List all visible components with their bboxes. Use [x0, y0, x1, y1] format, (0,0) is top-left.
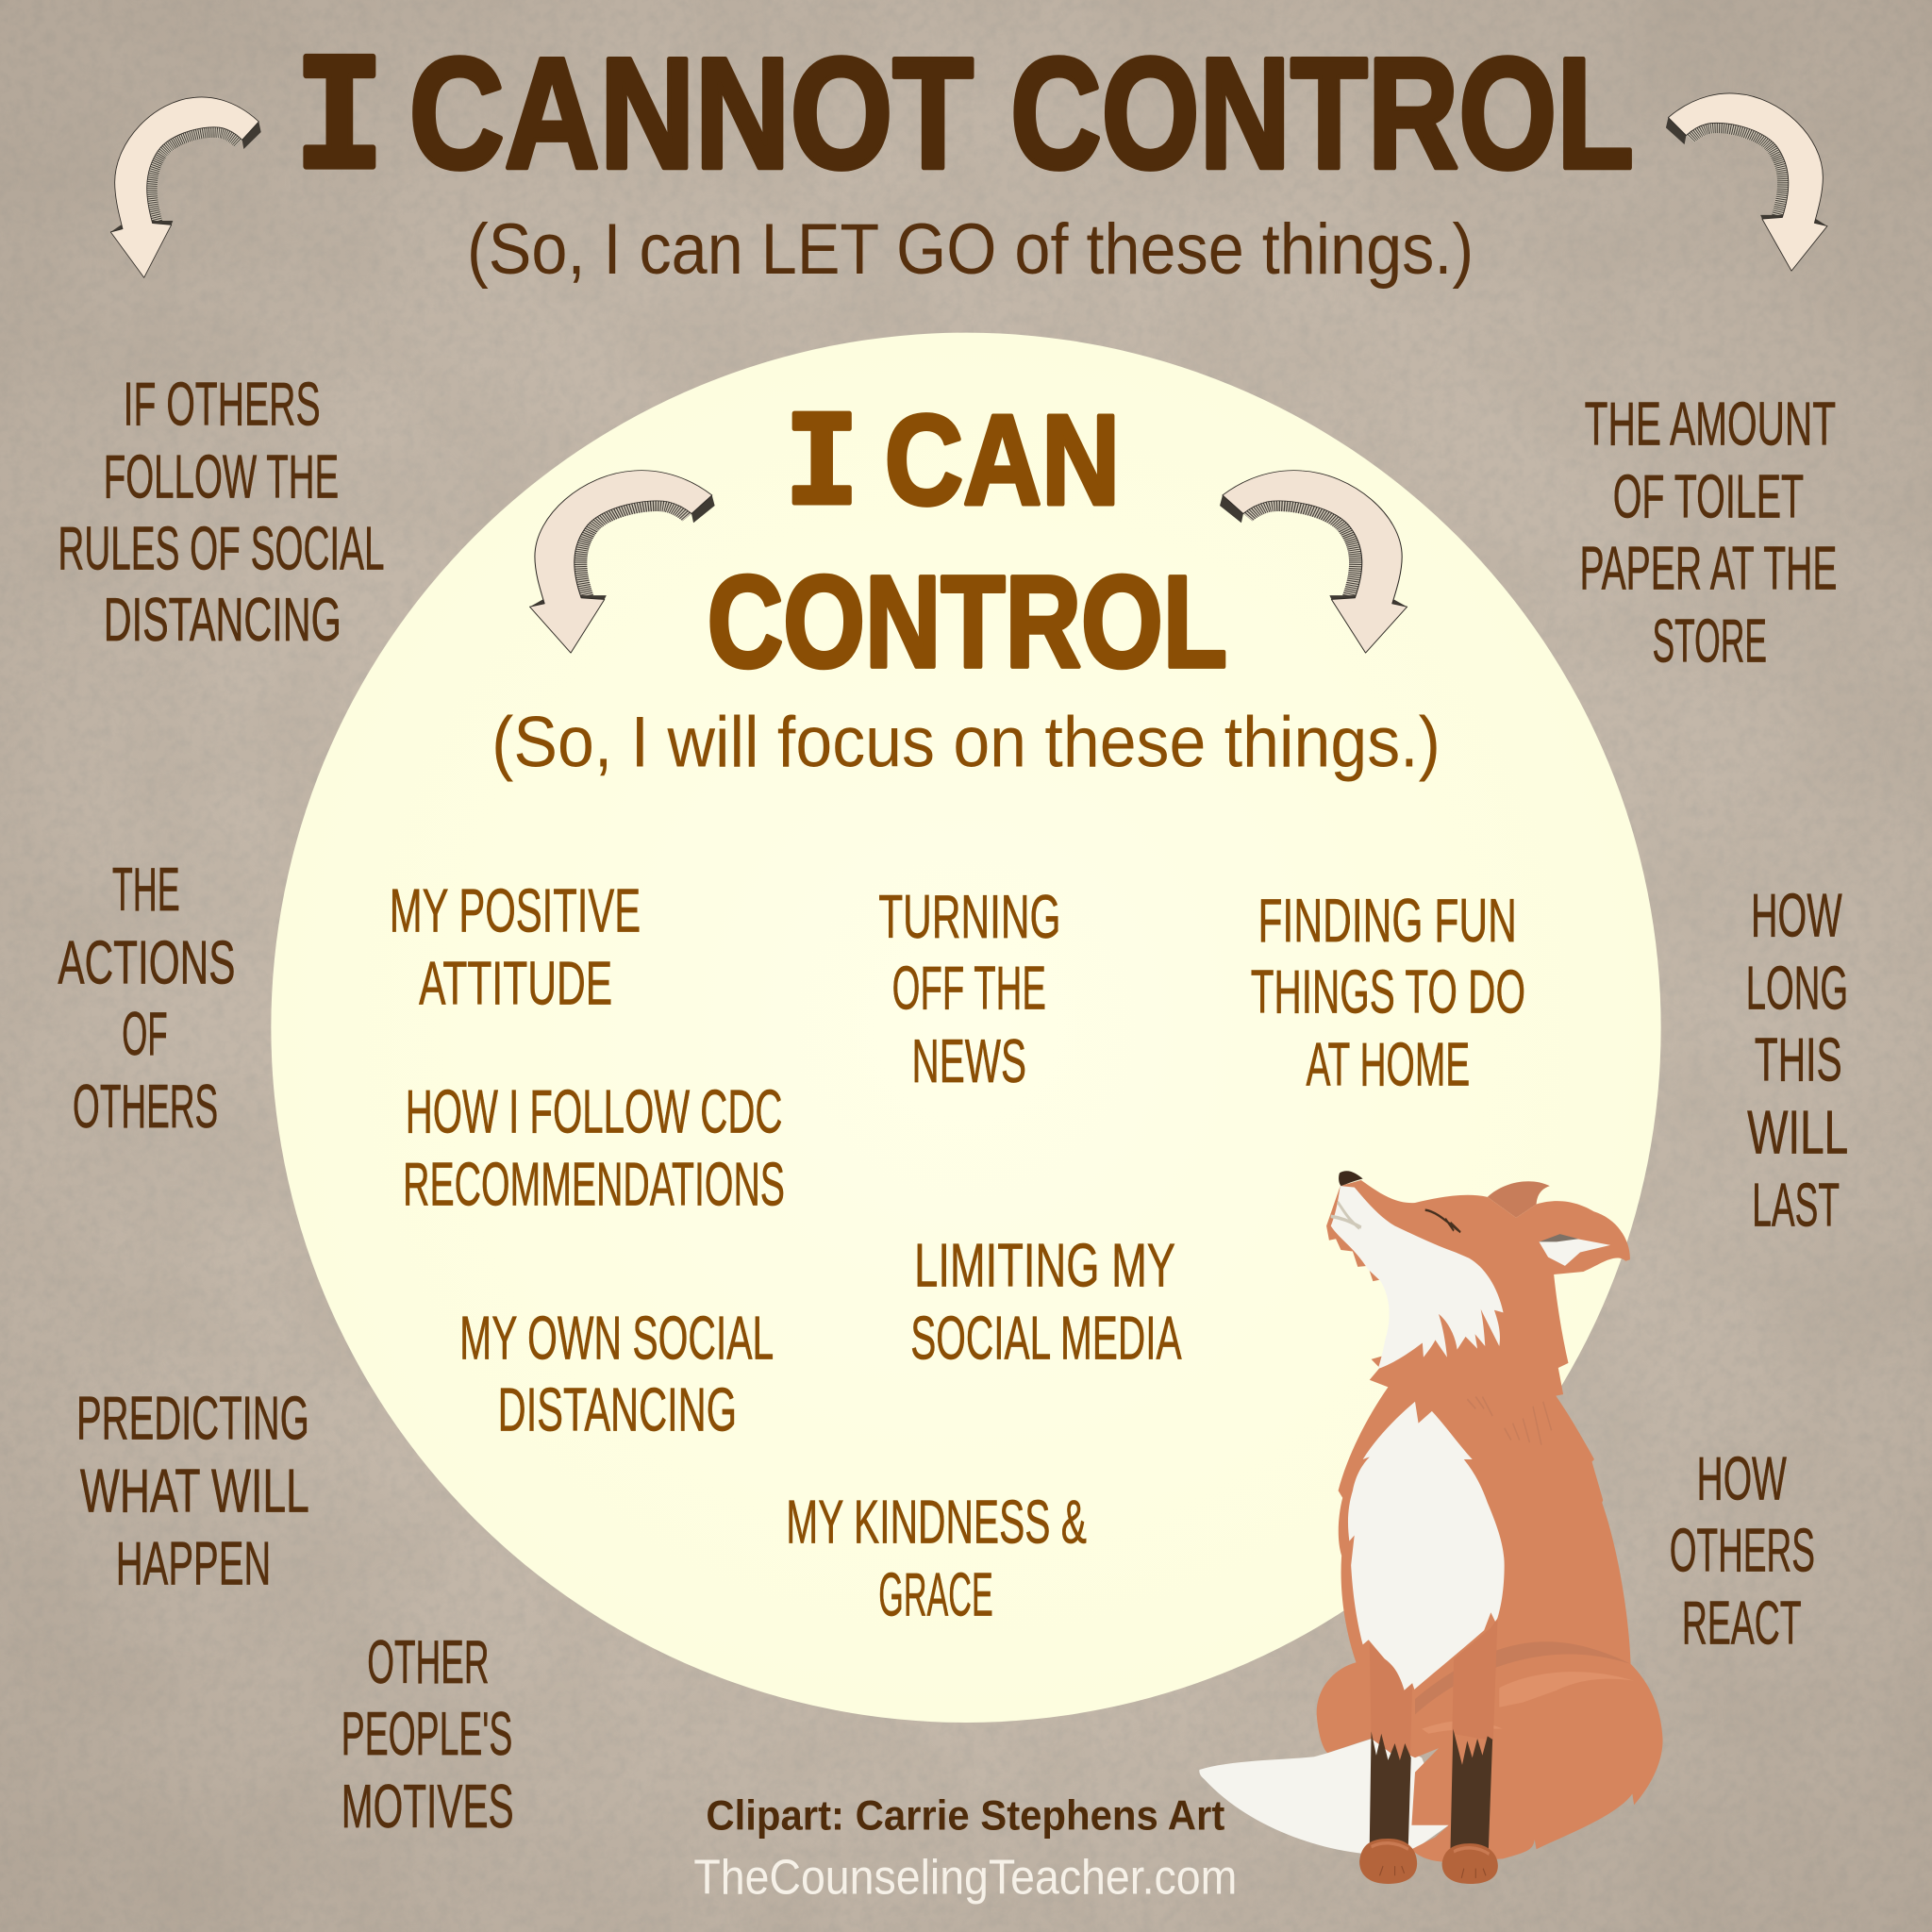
credit: clipart: Clipart: Carrie Stephens Art: [706, 1793, 1224, 1840]
can control: own social distancing: [459, 1304, 774, 1443]
fox: right sock: [1451, 1729, 1492, 1849]
can control: turning off news: TURNING: [878, 882, 1061, 951]
can control: CDC recommendations: [403, 1076, 785, 1218]
fox: left paw: [1359, 1839, 1417, 1884]
cannot control: actions of others: ACTIONS: [58, 927, 235, 996]
subtitle: focus: (So, I will focus on these things.): [491, 702, 1441, 782]
can control: own social distancing: DISTANCING: [498, 1374, 737, 1443]
fox: haunch shade: [1415, 1641, 1631, 1714]
cannot control: how long: LAST: [1752, 1171, 1840, 1240]
fox: right foreleg: [1452, 1618, 1498, 1740]
cannot control: how long: THIS: [1755, 1024, 1842, 1093]
cannot control: motives: OTHER: [367, 1627, 490, 1696]
arrow: top right: [1666, 93, 1827, 271]
fox: tail tip: [1199, 1736, 1449, 1854]
cannot control: rules of social distancing: [58, 370, 385, 654]
cannot control: how others react: REACT: [1682, 1588, 1802, 1657]
cannot control: motives: MOTIVES: [341, 1772, 514, 1840]
cannot control: rules of social distancing: DISTANCING: [104, 585, 341, 654]
arrow: inner right: [1220, 471, 1407, 653]
can control: CDC recommendations: RECOMMENDATIONS: [403, 1149, 785, 1218]
fox: back ear: [1488, 1181, 1550, 1218]
fox: nose: [1339, 1171, 1363, 1186]
cannot control: predicting: HAPPEN: [116, 1529, 271, 1598]
cannot control: motives: PEOPLE'S: [341, 1699, 512, 1768]
can control: own social distancing: MY OWN SOCIAL: [459, 1304, 774, 1373]
can control: positive attitude: ATTITUDE: [419, 948, 612, 1017]
cannot control: actions of others: THE: [112, 855, 180, 924]
fox: face white: [1331, 1186, 1504, 1369]
heading: I can control: [708, 388, 1227, 695]
title: I cannot control: CONTROL: [1010, 26, 1634, 202]
cannot control: predicting: WHAT WILL: [80, 1457, 309, 1525]
cannot control: how others react: OTHERS: [1670, 1515, 1815, 1584]
can control: turning off news: OFF THE: [892, 954, 1046, 1023]
heading: I can control: I: [785, 391, 858, 544]
can control: positive attitude: [390, 875, 641, 1017]
cannot control: how others react: [1670, 1444, 1815, 1657]
fox: body: [1317, 1180, 1663, 1862]
credit: website: TheCounselingTeacher.com: [693, 1851, 1237, 1906]
cannot control: how others react: HOW: [1697, 1444, 1787, 1513]
fox: fur marks: [1467, 1397, 1552, 1445]
moon circle panel: [271, 333, 1661, 1723]
can control: kindness and grace: [786, 1487, 1087, 1628]
heading: I can control: CAN: [885, 388, 1120, 531]
heading: I can control: CONTROL: [708, 550, 1227, 695]
fox: muzzle lines: [1331, 1202, 1361, 1228]
cannot control: actions of others: OTHERS: [73, 1072, 218, 1141]
cannot control: how long: [1746, 881, 1848, 1240]
cannot control: actions of others: [58, 855, 235, 1141]
icon: fox illustration: [1199, 1171, 1663, 1884]
title: I cannot control: [294, 26, 1634, 216]
can control: limiting social media: [910, 1231, 1182, 1373]
fox: left foreleg: [1370, 1642, 1412, 1767]
fox: left sock: [1370, 1731, 1411, 1844]
can control: kindness and grace: MY KINDNESS &: [786, 1487, 1087, 1556]
can control: finding fun: THINGS TO DO: [1251, 958, 1525, 1026]
cannot control: motives: [341, 1627, 514, 1840]
subtitle: let go: (So, I can LET GO of these things.): [467, 209, 1474, 290]
cannot control: toilet paper: [1579, 390, 1837, 675]
can control: turning off news: NEWS: [912, 1026, 1026, 1095]
cannot control: rules of social distancing: RULES OF SOCIAL: [58, 513, 385, 582]
can control: turning off news: [878, 882, 1061, 1095]
title: I cannot control: CANNOT: [409, 26, 974, 202]
arrow: top left: [110, 97, 261, 277]
cannot control: toilet paper: STORE: [1653, 606, 1767, 675]
fox: eye: [1425, 1210, 1460, 1232]
can control: finding fun: [1251, 886, 1525, 1099]
arrow: inner left: [530, 471, 715, 653]
can control: positive attitude: MY POSITIVE: [390, 875, 641, 944]
can control: CDC recommendations: HOW I FOLLOW CDC: [406, 1076, 782, 1145]
cannot control: predicting: PREDICTING: [76, 1384, 309, 1453]
cannot control: toilet paper: OF TOILET: [1613, 462, 1804, 531]
cannot control: actions of others: OF: [122, 999, 168, 1068]
cannot control: rules of social distancing: FOLLOW THE: [104, 442, 339, 511]
can control: finding fun: FINDING FUN: [1258, 886, 1517, 955]
can control: finding fun: AT HOME: [1306, 1030, 1470, 1099]
can control: limiting social media: LIMITING MY: [914, 1231, 1175, 1300]
cannot control: rules of social distancing: IF OTHERS: [124, 370, 321, 439]
title: I cannot control: I: [294, 27, 385, 216]
can control: limiting social media: SOCIAL MEDIA: [910, 1304, 1182, 1373]
cannot control: how long: HOW: [1751, 881, 1842, 950]
fox: inner ear: [1539, 1236, 1610, 1266]
fox: right paw: [1442, 1843, 1498, 1884]
cannot control: how long: WILL: [1747, 1098, 1848, 1167]
can control: kindness and grace: GRACE: [878, 1559, 993, 1628]
fox: chest white: [1348, 1402, 1505, 1690]
cannot control: how long: LONG: [1746, 954, 1848, 1023]
cannot control: predicting: [76, 1384, 309, 1598]
